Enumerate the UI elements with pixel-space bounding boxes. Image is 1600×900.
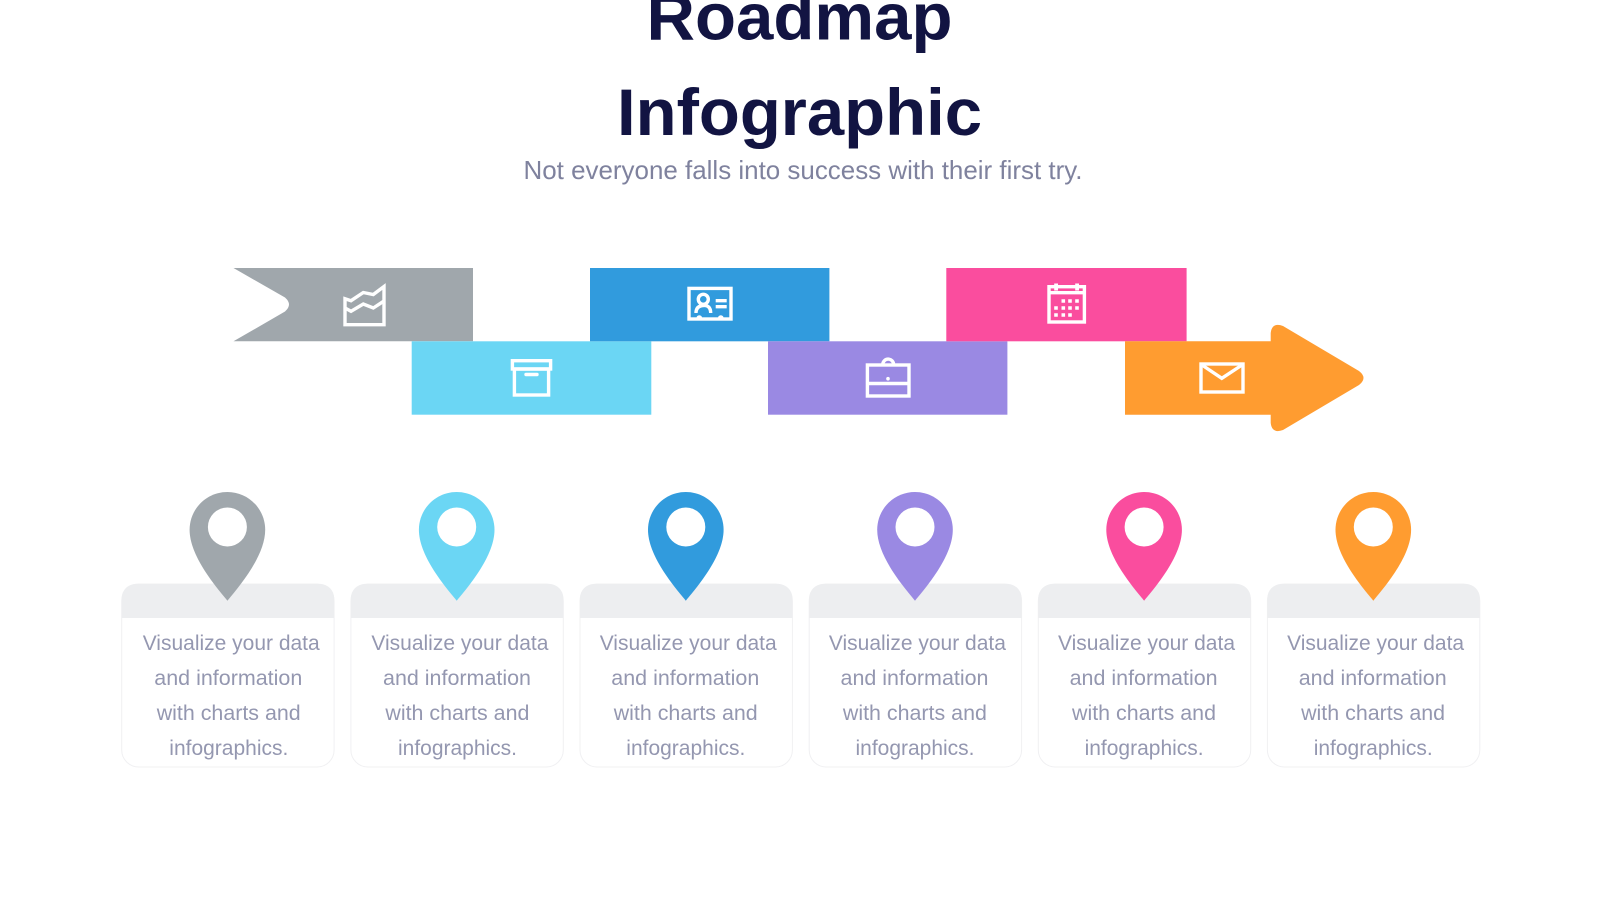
card header [1267,584,1480,618]
card 3 [580,492,792,767]
card text [1058,631,1235,760]
card text: with charts and [613,701,758,725]
title [617,0,982,149]
card body [1267,584,1480,767]
card text: and information [1070,666,1218,690]
card text: with charts and [156,701,301,725]
icon: briefcase [867,359,909,396]
card text: Visualize your data [371,631,548,655]
card 2 [351,492,563,767]
card text: and information [1299,666,1447,690]
segment 3: blue [590,268,829,341]
card text: and information [383,666,531,690]
pin [1336,492,1411,601]
card body [1038,584,1251,767]
card text: Visualize your data [1287,631,1464,655]
segment 1: grey ribbon [234,268,473,341]
card text: with charts and [1071,701,1216,725]
card text: and information [840,666,988,690]
segment 5: pink [946,268,1187,341]
icon: area chart [345,286,384,325]
card header [580,584,792,618]
card text: Visualize your data [600,631,777,655]
pin [1106,492,1182,601]
card text: with charts and [384,701,529,725]
card text: with charts and [1300,701,1445,725]
card 6 [1267,492,1480,767]
icon: archive box [512,361,551,395]
subtitle: Not everyone falls into success with their first try. [524,155,1082,185]
card text: infographics. [1314,736,1433,760]
icon: envelope [1201,364,1243,392]
pin [419,492,494,601]
card text [1287,631,1464,760]
segment 4: purple [768,341,1007,415]
title: Infographic [617,75,982,149]
pin [877,492,953,601]
card text [143,631,320,760]
card header [809,584,1022,618]
card text: infographics. [1085,736,1204,760]
card header [1038,584,1251,618]
card text: Visualize your data [1058,631,1235,655]
segment 6: orange arrow head [1125,325,1364,431]
card text [600,631,777,760]
icon: id card [689,288,731,319]
card body [122,584,334,767]
card text: and information [611,666,759,690]
card text [371,631,548,760]
pin [190,492,265,601]
card text: Visualize your data [829,631,1006,655]
card header [122,584,334,618]
card body [580,584,792,767]
segment 2: cyan [412,341,651,415]
card body [809,584,1022,767]
card text: with charts and [842,701,987,725]
card text: infographics. [626,736,745,760]
card header [351,584,563,618]
card 1 [122,492,334,767]
icon: briefcase clasp [886,377,890,381]
card 4 [809,492,1022,767]
pin [648,492,724,601]
card text: Visualize your data [143,631,320,655]
card text: infographics. [856,736,974,760]
icon: calendar [1048,284,1085,322]
card 5 [1038,492,1251,767]
card text [829,631,1006,760]
card text: infographics. [398,736,517,760]
card body [351,584,563,767]
card text: infographics. [169,736,288,760]
card text: and information [154,666,302,690]
roadmap arrow [234,268,1364,431]
